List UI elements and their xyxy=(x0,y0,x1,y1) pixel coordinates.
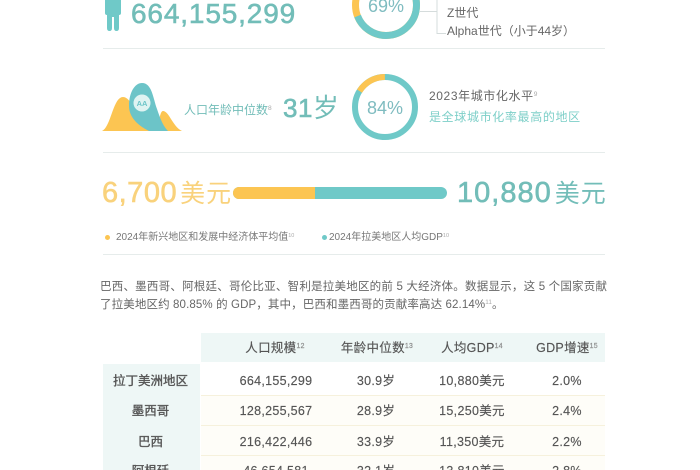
donut chart: 84% xyxy=(352,74,418,140)
generation labels xyxy=(447,6,575,38)
paragraph: 了拉美地区约 80.85% 的 GDP，其中，巴西和墨西哥的贡献率高达 62.14%11。 xyxy=(100,299,504,311)
table header: 年龄中位数13 xyxy=(341,341,413,355)
table header: 人口规模12 xyxy=(245,341,305,355)
legend xyxy=(105,231,449,243)
urbanization text: 2023年城市化水平9 xyxy=(429,89,538,103)
median age value: 31岁 xyxy=(283,93,339,123)
table header: GDP增速15 xyxy=(536,341,598,355)
row: Argentina xyxy=(132,464,582,470)
table header xyxy=(245,341,598,355)
row: Mexico: 128,255,567 xyxy=(240,404,312,418)
income value: Latin America: 10,880美元 xyxy=(457,177,607,209)
row: Mexico: 28.9岁 xyxy=(357,404,395,418)
row: Mexico: 2.4% xyxy=(552,404,582,418)
row: Latin America: 拉丁美洲地区 xyxy=(113,374,188,388)
row: Brazil xyxy=(138,435,582,449)
urbanization text xyxy=(429,89,581,124)
table header: 人均GDP14 xyxy=(441,341,503,355)
row: Latin America: 10,880美元 xyxy=(439,374,505,388)
paragraph: 巴西、墨西哥、阿根廷、哥伦比亚、智利是拉美地区的前 5 大经济体。数据显示，这 5 个国家贡献 xyxy=(100,281,607,293)
donut chart: 69% xyxy=(352,0,420,39)
table xyxy=(103,333,605,470)
generation labels: Z世代 xyxy=(447,6,478,20)
generation bracket xyxy=(420,0,446,34)
table row backgrounds xyxy=(201,396,605,470)
legend: 2024年新兴地区和发展中经济体平均值10 xyxy=(116,232,294,243)
generation labels: Alpha世代（小于44岁） xyxy=(447,24,575,38)
row: Mexico xyxy=(132,404,582,418)
row: Brazil: 11,350美元 xyxy=(440,435,504,449)
median age label: 人口年龄中位数8 xyxy=(184,103,272,117)
row: Latin America: 30.9岁 xyxy=(357,374,395,388)
row: Latin America: 664,155,299 xyxy=(240,374,312,388)
row: Latin America: 2.0% xyxy=(552,374,582,388)
row: Brazil: 216,422,446 xyxy=(240,435,312,449)
row: Mexico: 15,250美元 xyxy=(439,404,505,418)
legend: 2024年拉美地区人均GDP10 xyxy=(329,232,449,243)
row: Brazil: 2.2% xyxy=(552,435,582,449)
donut chart: 84%: 84% xyxy=(367,98,403,118)
row: Brazil: 33.9岁 xyxy=(357,435,395,449)
row: Latin America xyxy=(113,374,582,388)
comparison bar xyxy=(233,187,447,199)
icon: person xyxy=(105,0,121,31)
row: Mexico: 墨西哥 xyxy=(132,404,169,418)
icon: mountains: AA xyxy=(137,99,148,108)
paragraph xyxy=(100,280,607,311)
row: Brazil: 巴西 xyxy=(138,435,163,449)
icon: mountains xyxy=(102,83,182,131)
income value: emerging economies: 6,700美元 xyxy=(102,177,232,209)
urbanization text: 是全球城市化率最高的地区 xyxy=(429,110,581,124)
